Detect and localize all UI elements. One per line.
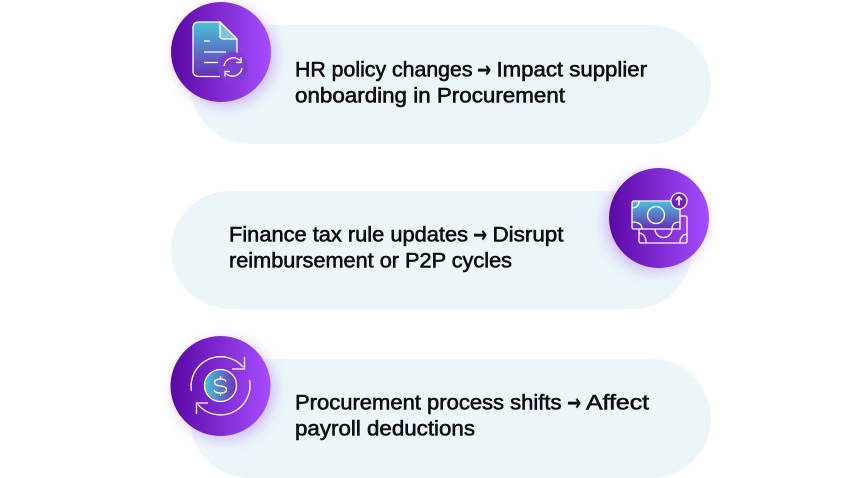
pill background 3: [190, 359, 711, 478]
text: Procurement process shifts: Procurement process shifts: [295, 392, 562, 414]
text: Procurement process shifts: →: [567, 391, 581, 416]
text: HR policy changes: →: [477, 58, 491, 83]
text: HR policy changes: Impact supplier: [496, 58, 647, 82]
panel: Finance tax rule updates: [171, 168, 709, 309]
pill background 1: [190, 25, 711, 144]
icon: circular dollar exchange: [170, 336, 274, 440]
panel: Procurement process shifts: [170, 336, 711, 478]
icon: document with refresh: [171, 2, 275, 106]
text: HR policy changes: HR policy changes: [295, 58, 472, 82]
panel: HR policy changes: [171, 2, 711, 144]
pill background 2: [171, 191, 692, 309]
text: Finance tax rule updates: Finance tax rule updates: [229, 224, 468, 246]
text: Finance tax rule updates: [229, 223, 564, 272]
text: Procurement process shifts: [295, 391, 649, 440]
text: HR policy changes: [295, 58, 647, 108]
icon: money with up arrow: [605, 168, 709, 272]
text: Procurement process shifts: payroll deductions: [295, 418, 475, 440]
text: Procurement process shifts: Affect: [586, 392, 649, 414]
text: Finance tax rule updates: reimbursement or P2P cycles: [229, 250, 512, 272]
text: Finance tax rule updates: →: [473, 223, 487, 248]
text: Finance tax rule updates: Disrupt: [492, 224, 564, 246]
text: HR policy changes: onboarding in Procurement: [295, 84, 565, 108]
